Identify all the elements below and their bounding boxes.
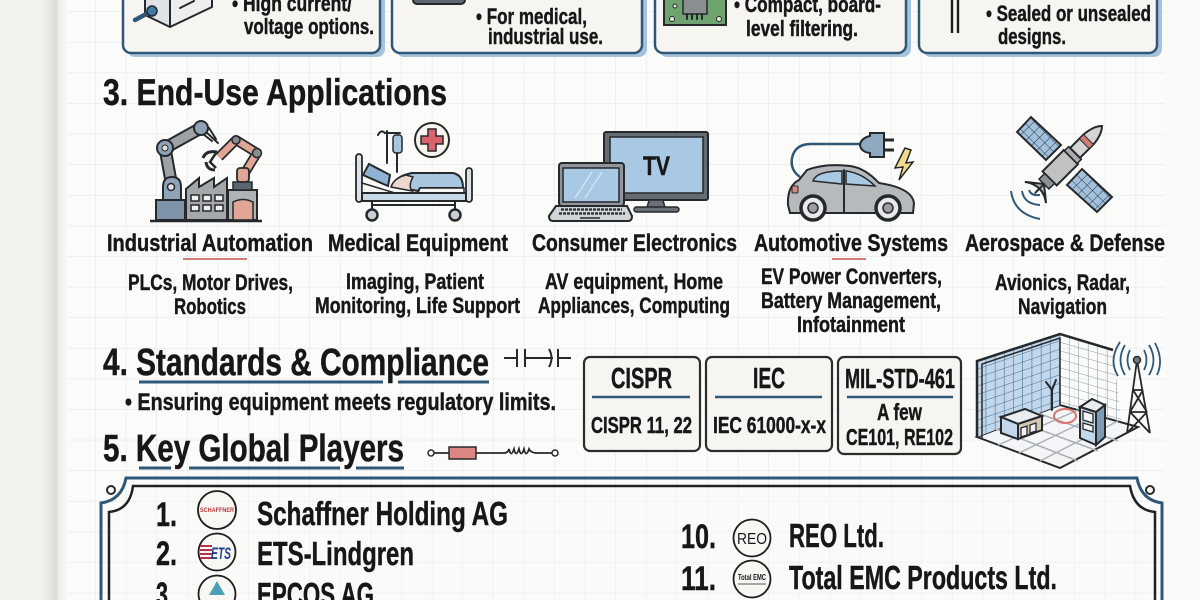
text: consumer examples: AV equipment, Home [545, 269, 723, 294]
panel: MIL-STD-461 standard: MIL-STD-461 [845, 363, 955, 394]
list item: Total EMC Products Ltd.: Total EMC [738, 573, 766, 582]
icon: hospital bed with patient [356, 123, 472, 220]
panel: MIL-STD-461 standard: A few [877, 399, 922, 425]
text: sealed designs [986, 1, 1151, 49]
label: medical equipment [315, 230, 521, 318]
text: industrial examples [128, 270, 293, 319]
list item: ETS-Lindgren: 2. [156, 535, 177, 573]
text: standards description: • Ensuring equipment meets regulatory limits. [125, 389, 556, 416]
icon: circuit board [664, 0, 726, 25]
text: medical use [476, 4, 603, 49]
text: automotive examples: Battery Management, [761, 288, 941, 313]
panel: CISPR standard [584, 357, 700, 451]
text: sealed designs: designs. [998, 24, 1066, 49]
list item: Schaffner Holding AG: Schaffner Holding AG [257, 495, 508, 532]
panel: CISPR standard: CISPR 11, 22 [591, 412, 692, 438]
panel: IEC standard: IEC 61000-x-x [713, 412, 826, 438]
panel: CISPR standard: CISPR [611, 363, 672, 395]
label: automotive systems [754, 230, 948, 337]
panel: card high current filters [123, 0, 385, 57]
icon: capacitor circuit symbol [504, 349, 571, 367]
text: industrial examples: PLCs, Motor Drives, [128, 270, 293, 295]
text: compact filtering [734, 0, 881, 41]
list item: ETS-Lindgren: ETS-Lindgren [257, 535, 414, 572]
text: compact filtering: level filtering. [746, 16, 858, 41]
list item: REO Ltd. [681, 517, 884, 556]
icon: resistor and inductor symbol [428, 447, 558, 459]
text: medical examples [315, 269, 521, 318]
list item: Total EMC Products Ltd. [681, 559, 1057, 598]
text: automotive examples: EV Power Converters, [761, 264, 942, 289]
text: medical examples: Monitoring, Life Support [315, 293, 521, 318]
panel: MIL-STD-461 standard [838, 357, 961, 454]
list item: ETS-Lindgren: ETS [211, 544, 231, 563]
text: aerospace examples: Avionics, Radar, [995, 270, 1130, 295]
list item: Schaffner Holding AG: 1. [156, 496, 177, 534]
panel: key players frame [101, 478, 1162, 600]
text: aerospace examples: Navigation [1018, 294, 1107, 319]
text: sealed designs: • Sealed or unsealed [986, 1, 1151, 26]
text: medical use: industrial use. [488, 24, 603, 49]
text: consumer examples: Appliances, Computing [538, 293, 730, 318]
panel: card feedthrough filters [919, 0, 1162, 57]
text: medical use: • For medical, [476, 4, 587, 29]
panel: card board-level filters [655, 0, 911, 57]
text: automotive examples [761, 264, 942, 337]
label: automotive systems: Automotive Systems [754, 230, 948, 257]
list item: REO Ltd.: REO Ltd. [789, 517, 884, 554]
icon: television and laptop [549, 132, 708, 221]
panel: IEC standard [706, 357, 832, 451]
icon: medical filter module [413, 0, 465, 4]
list item: ETS-Lindgren [156, 534, 414, 573]
list item: Total EMC Products Ltd.: 11. [681, 560, 716, 598]
list item: Schaffner Holding AG [156, 491, 508, 534]
panel: card medical filters [392, 0, 647, 57]
heading: end-use applications: 3. End-Use Applications [103, 72, 447, 113]
text: high current options: voltage options. [244, 14, 374, 39]
label: consumer electronics: Consumer Electronics [532, 230, 737, 257]
icon: chassis filter box [135, 0, 212, 27]
label: aerospace and defense [965, 230, 1165, 319]
heading: key global players: 5. Key Global Players [103, 428, 404, 470]
icon: television and laptop: TV [643, 151, 670, 181]
icon: satellite [1011, 115, 1113, 219]
label: industrial automation: Industrial Automation [107, 230, 313, 257]
text: industrial examples: Robotics [174, 294, 246, 319]
list item: Schaffner Holding AG: SCHAFFNER [200, 508, 235, 514]
panel: MIL-STD-461 standard: CE101, RE102 [846, 424, 953, 450]
text: medical examples: Imaging, Patient [346, 269, 485, 294]
text: high current options [232, 0, 374, 39]
panel: IEC standard: IEC [753, 363, 785, 395]
label: consumer electronics [532, 230, 737, 318]
icon: industrial robots and factory [150, 121, 262, 221]
label: medical equipment: Medical Equipment [328, 230, 508, 257]
text: automotive examples: Infotainment [797, 312, 906, 337]
icon: terminal leads [952, 0, 958, 33]
icon: EMC test chamber and antenna tower [977, 334, 1160, 468]
label: industrial automation [107, 230, 313, 319]
list item: EPCOS AG [156, 576, 374, 600]
list item: REO Ltd.: 10. [681, 518, 716, 556]
text: aerospace examples [995, 270, 1130, 319]
heading: standards and compliance: 4. Standards & Compliance [103, 342, 489, 384]
text: consumer examples [538, 269, 730, 318]
list item: REO Ltd.: REO [737, 531, 767, 548]
icon: electric car with plug [788, 133, 914, 220]
list item: Total EMC Products Ltd.: Total EMC Products Ltd. [789, 559, 1057, 596]
